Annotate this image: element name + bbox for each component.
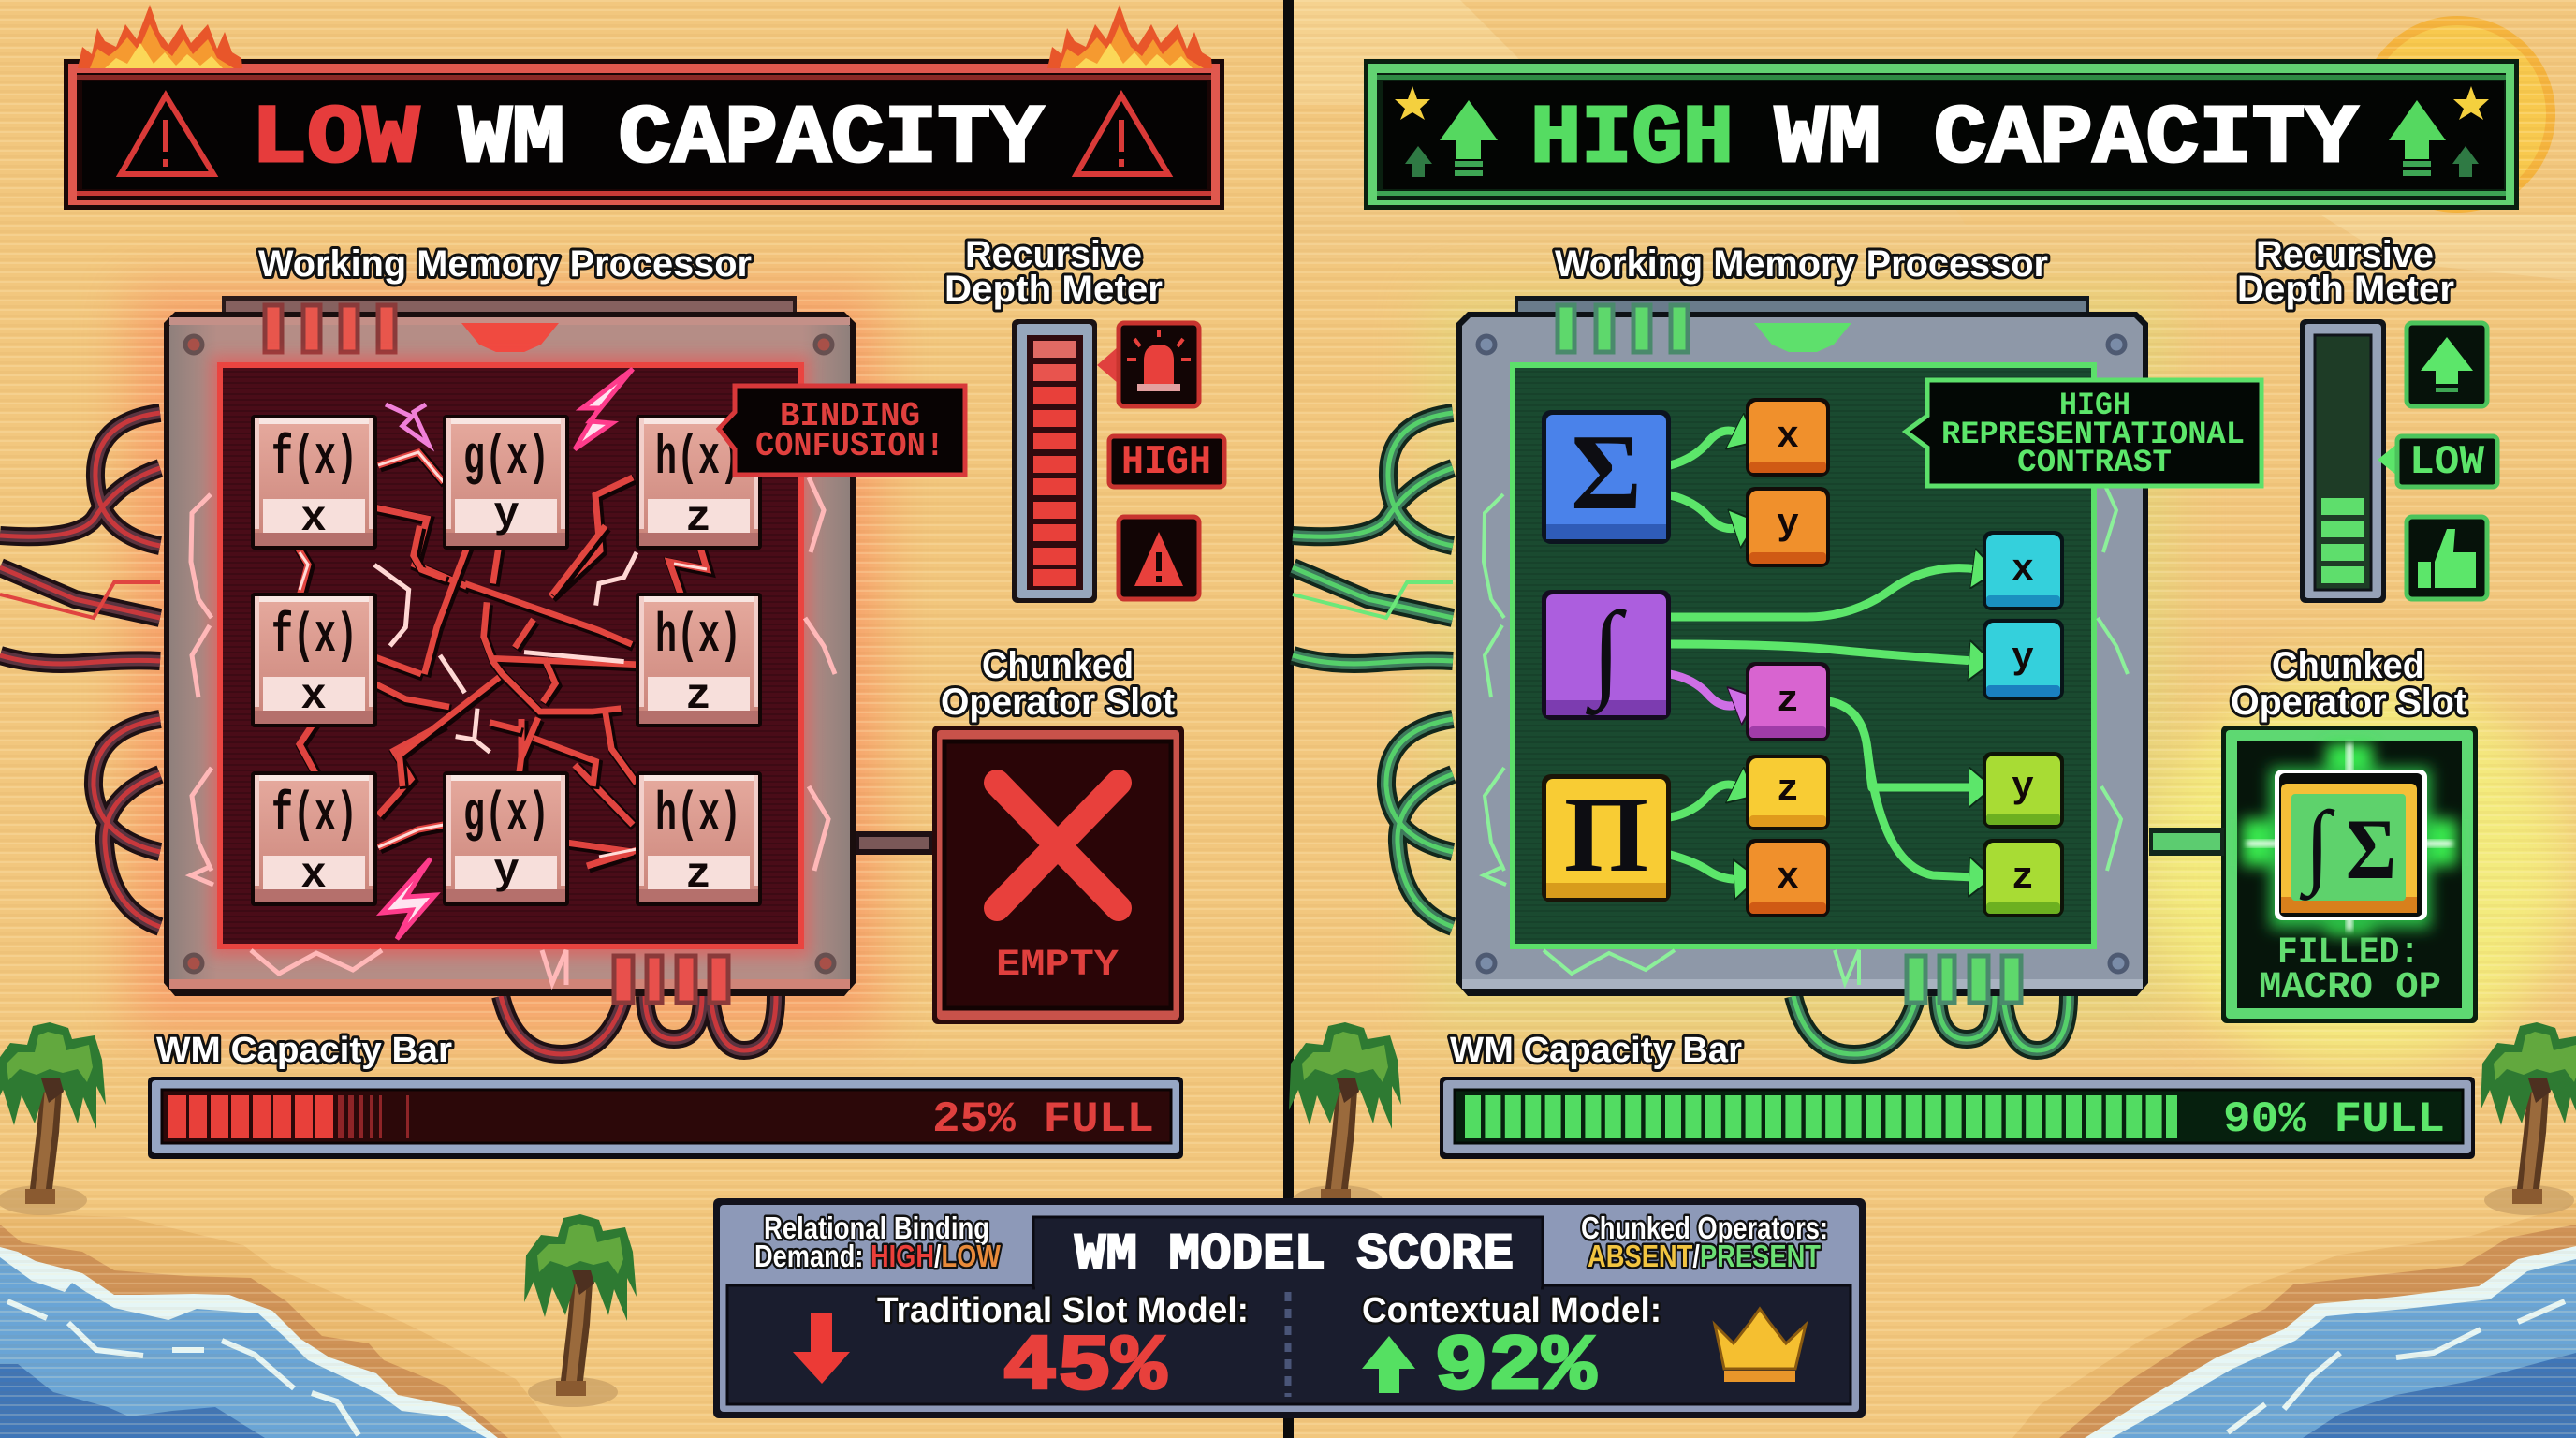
- capacity bar left: [148, 1077, 1183, 1159]
- palm tree center: [524, 1214, 637, 1407]
- chunked operators note: Chunked Operators:: [1581, 1211, 1828, 1245]
- tile row 2: f(x) x: [251, 593, 377, 727]
- screen glow: [211, 356, 810, 957]
- variable tile magenta z: z: [1777, 681, 1799, 723]
- dashed divider: [1284, 1292, 1292, 1397]
- operator tile: pi: Π: [1564, 775, 1648, 895]
- traditional value: 45%: [1003, 1324, 1167, 1413]
- vents top: [265, 305, 395, 352]
- variable tile yellow z: z: [1777, 770, 1799, 812]
- callout: binding confusion: CONFUSION!: [755, 427, 944, 465]
- vents bottom: [614, 956, 728, 1003]
- arrows up right: [2389, 100, 2479, 177]
- warning icon: [1119, 517, 1199, 599]
- label: recursive depth meter left: Depth Meter: [944, 269, 1163, 310]
- label: recursive depth meter left: [944, 234, 1163, 310]
- tile row 2: h(x) z: h(x): [655, 607, 741, 668]
- score panel: [713, 1198, 1866, 1418]
- lightning bolt top: [575, 369, 633, 449]
- chunked slot right: filled: [2221, 726, 2478, 1023]
- screws: [185, 336, 834, 972]
- right beach and ocean: [2012, 1203, 2576, 1438]
- variable tile cyan y: y: [2012, 638, 2034, 680]
- tile row 3: h(x) z: [636, 771, 762, 906]
- callout: representational contrast: HIGH: [2059, 389, 2130, 424]
- processor left: [164, 296, 965, 1003]
- tile row 3: h(x) z: z: [685, 851, 711, 900]
- star left: [1395, 86, 1430, 120]
- x mark: [997, 783, 1119, 908]
- variable tile yellow z: [1746, 755, 1830, 830]
- label: capacity bar right: WM Capacity Bar: [1450, 1031, 1742, 1070]
- tile row 2: h(x) z: z: [685, 672, 711, 721]
- filled text: FILLED:: [2277, 932, 2420, 975]
- capacity bar right: [1440, 1077, 2475, 1159]
- relational binding note: Relational Binding: [764, 1211, 989, 1245]
- label: recursive depth meter right: [2237, 234, 2454, 310]
- relational binding note: [754, 1211, 1002, 1273]
- variable tile orange x: [1746, 398, 1830, 477]
- glows behind panels: [131, 290, 2574, 1067]
- operator tile: sigma: [1542, 410, 1671, 544]
- label: recursive depth meter right: Recursive: [2256, 234, 2434, 275]
- purple arrow: [1670, 674, 1739, 706]
- variable tile cyan x: [1983, 531, 2064, 610]
- label: chunked operator slot right: Chunked: [2272, 645, 2424, 686]
- high badge: HIGH: [1121, 439, 1211, 486]
- callout: representational contrast: CONTRAST: [2017, 446, 2172, 481]
- frame sparks: [191, 477, 835, 985]
- tile row 1: h(x) z: z: [685, 494, 711, 543]
- callout: binding confusion: [719, 386, 965, 475]
- variable tile lime z: [1983, 839, 2064, 917]
- traditional label: Traditional Slot Model:: [877, 1291, 1249, 1330]
- capacity bar right: 90% FULL: [2223, 1095, 2445, 1144]
- tile row 1: f(x) x: f(x): [271, 429, 358, 490]
- variable tile lime y: y: [2012, 767, 2034, 809]
- label: chunked operator slot right: Operator Slot: [2231, 682, 2466, 723]
- screen: [220, 365, 801, 946]
- arrows up left: [1405, 100, 1498, 177]
- mapping arrows: [1670, 431, 1978, 879]
- callout: representational contrast: REPRESENTATIONAL: [1941, 418, 2245, 453]
- lightning bolt bottom: [382, 858, 435, 939]
- flames left: [78, 5, 242, 68]
- flames right: [1047, 5, 1212, 68]
- tile row 1: g(x) y: g(x): [463, 429, 549, 490]
- variable tile orange y: [1746, 487, 1830, 567]
- low badge: [2378, 436, 2497, 487]
- center divider: [1283, 0, 1294, 1438]
- macro op text: MACRO OP: [2259, 967, 2441, 1009]
- operator tile: integral: ∫: [1585, 591, 1627, 716]
- status dome: [461, 323, 559, 352]
- tile row 1: f(x) x: [251, 415, 377, 550]
- chunked operators note: [1581, 1211, 1828, 1273]
- tile row 1: f(x) x: x: [300, 494, 327, 543]
- variable tile cyan y: [1983, 619, 2064, 700]
- macro op icon: Σ: [2346, 801, 2396, 897]
- connector left: [856, 831, 932, 855]
- variable tile orange x: x: [1777, 417, 1799, 459]
- left beach and ocean: [0, 1213, 562, 1438]
- tile row 3: f(x) x: x: [300, 851, 327, 900]
- cables right: [1293, 413, 2069, 1054]
- banner: high capacity: [1364, 59, 2519, 210]
- tile row 2: h(x) z: [636, 593, 762, 727]
- tile row 3: g(x) y: y: [493, 847, 520, 896]
- tile row 2: f(x) x: x: [300, 672, 327, 721]
- tangled binding lines: [291, 452, 709, 868]
- tile row 1: g(x) y: y: [493, 491, 520, 539]
- label: chunked operator slot left: Chunked: [982, 645, 1134, 686]
- tile row 3: f(x) x: [251, 771, 377, 906]
- banner title wm capacity: WM CAPACITY: [459, 94, 1044, 186]
- banner: low capacity: [64, 59, 1224, 210]
- variable tile orange x lower: [1746, 839, 1830, 917]
- sun: [2359, 16, 2555, 213]
- tile row 1: h(x) z: [636, 415, 762, 550]
- label: chunked operator slot right: [2231, 645, 2466, 723]
- tile row 3: f(x) x: f(x): [271, 785, 358, 846]
- chunked slot left: empty: [932, 726, 1184, 1024]
- empty text: EMPTY: [996, 945, 1119, 987]
- variable tile lime y: [1983, 752, 2064, 829]
- macro op icon: ∫: [2299, 792, 2335, 901]
- score title: WM MODEL SCORE: [1075, 1226, 1514, 1284]
- label: working memory processor right: Working Memory Processor: [1555, 243, 2048, 285]
- right sky with pale clouds: [1294, 0, 2576, 281]
- macro op icon: [2275, 770, 2427, 920]
- connector right: [2149, 828, 2224, 856]
- depth meter right: [2300, 319, 2386, 603]
- palm tree right panel left: [1289, 1022, 1401, 1215]
- operator tile: sigma: Σ: [1571, 413, 1642, 533]
- alarm icon: [1097, 323, 1199, 406]
- label: chunked operator slot left: [941, 645, 1175, 723]
- label: capacity bar left: WM Capacity Bar: [156, 1031, 452, 1070]
- up arrow: [1362, 1336, 1415, 1393]
- cables left: [0, 413, 776, 1054]
- chunked operators note: ABSENT/PRESENT: [1588, 1239, 1821, 1273]
- palm tree left: [0, 1022, 106, 1215]
- tile row 1: h(x) z: h(x): [655, 429, 741, 490]
- label: recursive depth meter right: Depth Meter: [2237, 269, 2454, 310]
- label: working memory processor left: Working Memory Processor: [258, 243, 752, 285]
- spark pink: [386, 404, 429, 445]
- label: chunked operator slot left: Operator Slot: [941, 682, 1175, 723]
- palm tree far right: [2481, 1022, 2576, 1215]
- processor right: [1456, 296, 2261, 1003]
- callout: binding confusion: BINDING: [780, 397, 920, 435]
- label: recursive depth meter left: Recursive: [965, 234, 1142, 275]
- variable tile orange x lower: x: [1777, 858, 1799, 900]
- low badge: LOW: [2409, 439, 2485, 486]
- variable tile lime z: z: [2012, 858, 2034, 900]
- callout: representational contrast: [1906, 380, 2261, 486]
- banner title low: LOW: [251, 94, 419, 186]
- variable tile magenta z: [1746, 662, 1830, 741]
- operator tile: pi: [1542, 774, 1671, 902]
- tile row 2: f(x) x: f(x): [271, 607, 358, 668]
- crown icon: [1715, 1309, 1806, 1382]
- green burst: [2242, 743, 2457, 935]
- variable tile orange y: y: [1777, 504, 1799, 546]
- contextual label: Contextual Model:: [1362, 1291, 1661, 1330]
- variable tile cyan x: x: [2012, 550, 2034, 592]
- tile row 1: g(x) y: [443, 415, 569, 550]
- depth meter left: [1012, 319, 1097, 603]
- banner title wm capacity: WM CAPACITY: [1775, 94, 2358, 186]
- contextual value: 92%: [1434, 1324, 1597, 1413]
- tile row 3: g(x) y: [443, 771, 569, 906]
- capacity bar left: 25% FULL: [932, 1095, 1154, 1144]
- tile row 3: g(x) y: g(x): [463, 785, 549, 846]
- banner title high: HIGH: [1530, 94, 1734, 186]
- star right: [2453, 86, 2489, 120]
- up arrow icon: [2407, 323, 2487, 406]
- warning triangle right: [1076, 95, 1168, 174]
- warning triangle left: [121, 95, 213, 174]
- down arrow: [793, 1313, 850, 1384]
- tile row 3: h(x) z: h(x): [655, 785, 741, 846]
- operator tile: integral: [1542, 590, 1671, 720]
- thumbs up icon: [2407, 517, 2487, 599]
- relational binding note: Demand: HIGH/LOW: [754, 1239, 1002, 1273]
